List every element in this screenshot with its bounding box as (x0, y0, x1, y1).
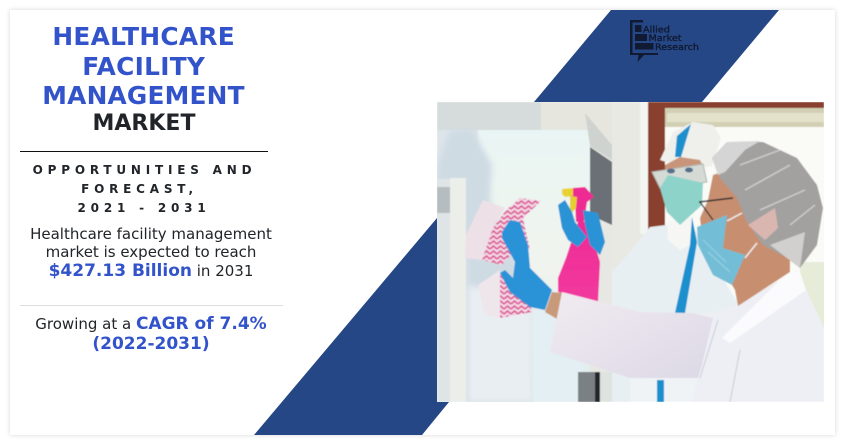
blue glove wiping (500, 220, 552, 310)
subtitle: opportunities and forecast: 2021 - 2031 (78, 201, 210, 215)
pink spray bottle (558, 187, 600, 302)
subtitle: opportunities and forecast: OPPORTUNITIES AND (33, 163, 256, 177)
background: glass door and window (437, 102, 612, 402)
photo: healthcare workers cleaning a glass door (437, 102, 825, 402)
lab coat (550, 270, 824, 402)
bottom blue diagonal band (254, 218, 449, 435)
title: MANAGEMENT (42, 81, 245, 110)
CAGR statement (35, 314, 267, 354)
logo: Allied Market Research (630, 20, 699, 62)
title: MARKET (93, 111, 195, 136)
main worker: neck and face (697, 170, 790, 306)
title (42, 22, 245, 136)
forearm (545, 292, 562, 319)
subtitle: opportunities and forecast (33, 163, 256, 215)
title: FACILITY (82, 52, 206, 81)
CAGR statement: Growing at a CAGR of 7.4% (35, 314, 267, 334)
market size statement: Healthcare facility management (30, 225, 272, 243)
top blue diagonal band (534, 10, 779, 102)
window frame (640, 102, 825, 328)
logo: Allied Market Research: Market (648, 34, 682, 44)
divider (20, 305, 283, 306)
blue glove holding the bottle (558, 200, 605, 255)
title: HEALTHCARE (52, 22, 235, 51)
subtitle: opportunities and forecast: FORECAST, (81, 182, 198, 196)
market size statement: market is expected to reach (46, 243, 256, 261)
CAGR statement: (2022-2031) (92, 334, 210, 354)
logo: Allied Market Research: Allied (643, 26, 670, 36)
hair net (712, 141, 823, 268)
market size statement: $427.13 Billion in 2031 (49, 261, 253, 281)
second worker in protective suit (612, 122, 745, 402)
cleaning cloth (465, 198, 541, 318)
divider under title (20, 151, 268, 152)
market size statement (30, 225, 272, 281)
logo: Allied Market Research: Research (655, 43, 699, 53)
